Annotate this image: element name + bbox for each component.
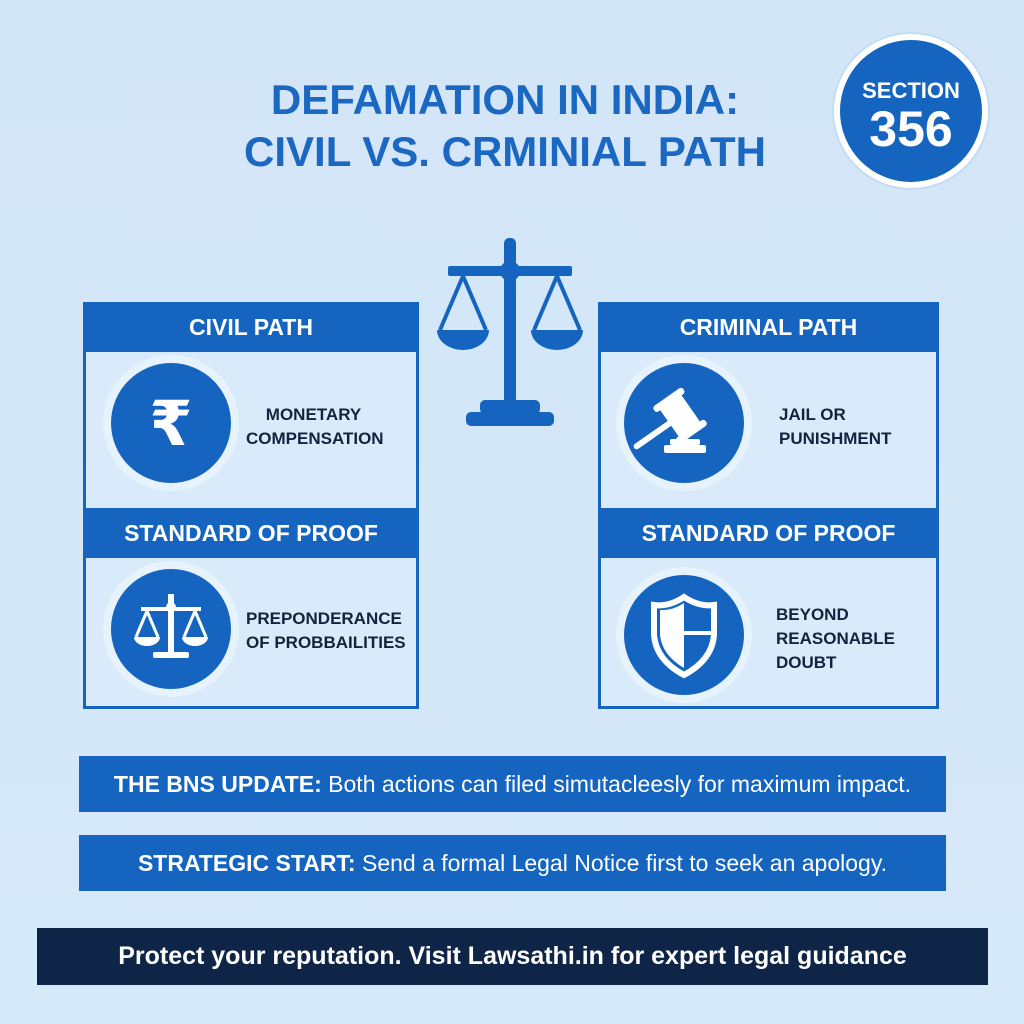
header: standard of proof: STANDARD OF PROOF	[124, 520, 378, 546]
text: beyond reasonable doubt: REASONABLE	[776, 629, 895, 648]
text: beyond reasonable doubt	[776, 605, 895, 672]
title: CIVIL VS. CRMINIAL PATH	[244, 128, 766, 175]
icon: rupee	[103, 355, 239, 491]
text: preponderance: PREPONDERANCE	[246, 609, 402, 628]
panel: criminal path	[598, 302, 939, 709]
text: preponderance	[246, 609, 406, 652]
text: jail or punishment: JAIL OR	[779, 405, 846, 424]
header: civil path	[86, 302, 416, 352]
text: preponderance: OF PROBBAILITIES	[246, 633, 406, 652]
text: jail or punishment: PUNISHMENT	[779, 429, 891, 448]
header: standard of proof	[601, 508, 936, 558]
banner: strategic start	[79, 835, 946, 891]
badge: section 356	[834, 34, 988, 188]
panel: civil path	[83, 302, 419, 709]
icon: shield	[616, 567, 752, 703]
footer: Protect your reputation. Visit Lawsathi.in for expert legal guidance	[118, 942, 907, 970]
banner: strategic start: STRATEGIC START: Send a formal Legal Notice first to seek an apology.	[138, 850, 887, 876]
banner: BNS update: THE BNS UPDATE: Both actions can filed simutacleesly for maximum impact.	[114, 771, 911, 797]
header: criminal path	[601, 302, 936, 352]
badge: section 356: SECTION	[862, 78, 960, 103]
icon: rupee: ₹	[149, 387, 193, 460]
header: standard of proof	[86, 508, 416, 558]
text: monetary compensation: MONETARY	[266, 405, 361, 424]
title: DEFAMATION IN INDIA:	[271, 76, 739, 123]
badge: section 356: 356	[869, 101, 953, 157]
icon: gavel	[616, 355, 752, 491]
text: beyond reasonable doubt: BEYOND	[776, 605, 849, 624]
text: jail or punishment	[779, 405, 892, 448]
header: criminal path: CRIMINAL PATH	[680, 314, 857, 340]
banner: BNS update	[79, 756, 946, 812]
title	[244, 76, 766, 175]
header: standard of proof: STANDARD OF PROOF	[642, 520, 895, 546]
footer	[37, 928, 988, 985]
text: beyond reasonable doubt: DOUBT	[776, 653, 836, 672]
icon: central scale	[437, 238, 583, 426]
text: monetary compensation: COMPENSATION	[246, 429, 384, 448]
header: civil path: CIVIL PATH	[189, 314, 313, 340]
text: monetary compensation	[246, 405, 384, 448]
icon: small scale	[103, 561, 239, 697]
